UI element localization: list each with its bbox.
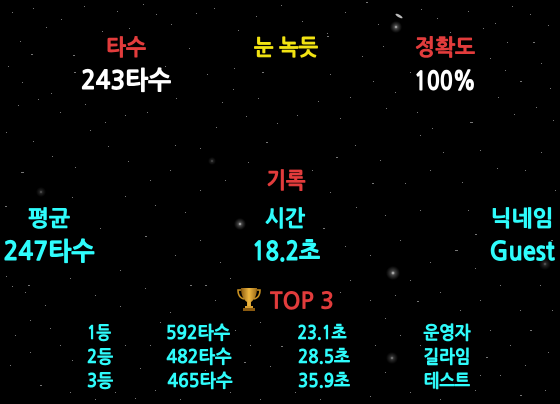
heading: 타수: 타수 (106, 36, 146, 59)
row: first: 1등 (87, 324, 111, 342)
row: second: 길라임 (424, 347, 470, 366)
value: 100%: 100% (414, 69, 476, 94)
row: second: 2등 (87, 348, 113, 366)
row: second: 482타수 (166, 347, 232, 366)
heading: snow melt: 눈 녹듯 (254, 36, 318, 59)
heading: top 3 (238, 288, 334, 313)
label: 평균: 평균 (28, 207, 70, 230)
row: third: 35.9초 (298, 372, 350, 390)
row: second: 28.5초 (298, 348, 350, 366)
value: Guest: Guest (490, 239, 555, 264)
row: first (87, 323, 471, 342)
heading: record: 기록 (266, 169, 306, 192)
label: 시간: 시간 (265, 207, 305, 230)
row: first: 운영자 (424, 323, 471, 342)
row: third: 465타수 (168, 371, 233, 390)
row: third: 테스트 (424, 371, 470, 390)
icon: trophy (238, 288, 260, 311)
value: 243타수: 243타수 (81, 67, 171, 93)
panel: average (4, 207, 94, 264)
heading text: TOP 3 (270, 291, 334, 313)
panel: typing speed (81, 36, 171, 93)
background glowing stars (36, 13, 551, 364)
panel: nickname (490, 207, 555, 264)
row: second (87, 347, 470, 366)
value: 18.2초: 18.2초 (252, 239, 320, 264)
heading: 정확도: 정확도 (415, 36, 475, 59)
row: first: 23.1초 (298, 324, 347, 342)
value: 247타수: 247타수 (4, 238, 94, 264)
label: 닉네임: 닉네임 (490, 207, 554, 230)
panel: time (252, 207, 320, 264)
row: third: 3등 (87, 372, 113, 390)
row: third (87, 371, 470, 390)
panel: accuracy (414, 36, 476, 94)
table: top 3 ranking (87, 323, 471, 390)
row: first: 592타수 (166, 323, 230, 342)
